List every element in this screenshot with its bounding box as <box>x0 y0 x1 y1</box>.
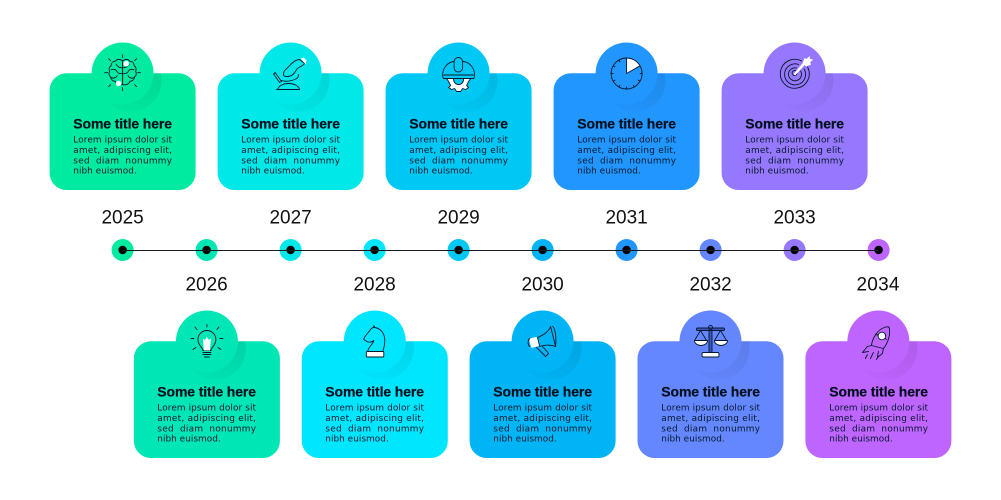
text block <box>661 403 761 445</box>
heading: Some title here <box>409 116 508 132</box>
icon: chess knight <box>364 326 385 357</box>
text block: nibh euismod. <box>325 435 389 445</box>
panel: card 2025 <box>50 42 196 190</box>
panel: card 2031 <box>554 42 700 190</box>
icon: light bulb <box>191 324 223 357</box>
heading: Some title here <box>661 384 760 400</box>
icon: rocket <box>862 327 890 360</box>
year 2026 <box>185 239 228 295</box>
text block: amet, adipiscing elit, <box>73 146 172 156</box>
text block <box>829 403 929 445</box>
icon: target with dart <box>780 56 813 88</box>
year 2033: 2033 <box>773 207 816 228</box>
panel: card 2032 <box>638 310 784 458</box>
heading: Some title here <box>577 116 676 132</box>
text block: sed diam nonummy <box>577 156 676 166</box>
year 2028 <box>353 239 396 295</box>
text block: sed diam nonummy <box>661 424 760 434</box>
year 2030 <box>521 239 564 295</box>
text block: sed diam nonummy <box>493 424 592 434</box>
year 2034 <box>856 239 900 295</box>
year 2028: 2028 <box>353 274 396 295</box>
text block: amet, adipiscing elit, <box>409 146 508 156</box>
text block: Lorem ipsum dolor sit <box>493 403 593 413</box>
year 2033 <box>773 207 816 261</box>
panel: card 2027 <box>218 42 364 190</box>
text block: Lorem ipsum dolor sit <box>325 403 425 413</box>
text block <box>157 403 257 445</box>
timeline <box>101 207 900 295</box>
text block: nibh euismod. <box>661 435 725 445</box>
icon: clock <box>611 58 642 89</box>
text block: amet, adipiscing elit, <box>493 414 592 424</box>
year 2026: 2026 <box>185 274 228 295</box>
year 2034: 2034 <box>856 274 900 295</box>
text block: nibh euismod. <box>745 167 809 177</box>
text block: nibh euismod. <box>493 435 557 445</box>
text block: sed diam nonummy <box>157 424 256 434</box>
heading: Some title here <box>829 384 928 400</box>
text block: nibh euismod. <box>157 435 221 445</box>
text block: sed diam nonummy <box>745 156 844 166</box>
icon: balance scales <box>694 326 728 357</box>
text block: amet, adipiscing elit, <box>661 414 760 424</box>
heading: Some title here <box>493 384 592 400</box>
year 2031: 2031 <box>605 207 648 228</box>
panel: card 2033 <box>722 42 868 190</box>
text block: sed diam nonummy <box>325 424 424 434</box>
text block: Lorem ipsum dolor sit <box>241 135 341 145</box>
year 2025 <box>101 207 144 261</box>
year 2027: 2027 <box>269 207 312 228</box>
text block: sed diam nonummy <box>73 156 172 166</box>
text block: Lorem ipsum dolor sit <box>73 135 173 145</box>
year 2032 <box>689 239 732 295</box>
year 2025: 2025 <box>101 207 144 228</box>
text block: amet, adipiscing elit, <box>241 146 340 156</box>
text block: nibh euismod. <box>829 435 893 445</box>
text block <box>73 135 173 177</box>
text block: amet, adipiscing elit, <box>829 414 928 424</box>
text block: nibh euismod. <box>577 167 641 177</box>
year 2031 <box>605 207 648 261</box>
text block: Lorem ipsum dolor sit <box>745 135 845 145</box>
text block <box>241 135 341 177</box>
text block: Lorem ipsum dolor sit <box>409 135 509 145</box>
text block <box>325 403 425 445</box>
text block: Lorem ipsum dolor sit <box>661 403 761 413</box>
icon: microscope <box>274 58 307 90</box>
text block <box>493 403 593 445</box>
panel: card 2030 <box>470 310 616 458</box>
heading: Some title here <box>745 116 844 132</box>
text block: amet, adipiscing elit, <box>325 414 424 424</box>
panel: card 2028 <box>302 310 448 458</box>
text block: amet, adipiscing elit, <box>577 146 676 156</box>
text block: nibh euismod. <box>409 167 473 177</box>
panel: card 2026 <box>134 310 280 458</box>
text block <box>577 135 677 177</box>
year 2029: 2029 <box>437 207 480 228</box>
icon: helmet with gear <box>443 58 475 92</box>
text block <box>409 135 509 177</box>
heading: Some title here <box>241 116 340 132</box>
text block: Lorem ipsum dolor sit <box>157 403 257 413</box>
heading: Some title here <box>157 384 256 400</box>
timeline axis <box>123 250 879 252</box>
text block: amet, adipiscing elit, <box>157 414 256 424</box>
text block: sed diam nonummy <box>829 424 928 434</box>
text block: nibh euismod. <box>241 167 305 177</box>
text block <box>745 135 845 177</box>
year 2029 <box>437 207 480 261</box>
year 2032: 2032 <box>689 274 732 295</box>
text block: Lorem ipsum dolor sit <box>577 135 677 145</box>
text block: amet, adipiscing elit, <box>745 146 844 156</box>
text block: sed diam nonummy <box>409 156 508 166</box>
text block: Lorem ipsum dolor sit <box>829 403 929 413</box>
year 2027 <box>269 207 312 261</box>
icon: megaphone <box>528 326 556 356</box>
panel: card 2029 <box>386 42 532 190</box>
panel: card 2034 <box>805 310 951 458</box>
text block: sed diam nonummy <box>241 156 340 166</box>
icon: brain <box>105 55 141 91</box>
year 2030: 2030 <box>521 274 564 295</box>
heading: Some title here <box>325 384 424 400</box>
text block: nibh euismod. <box>73 167 137 177</box>
heading: Some title here <box>73 116 172 132</box>
